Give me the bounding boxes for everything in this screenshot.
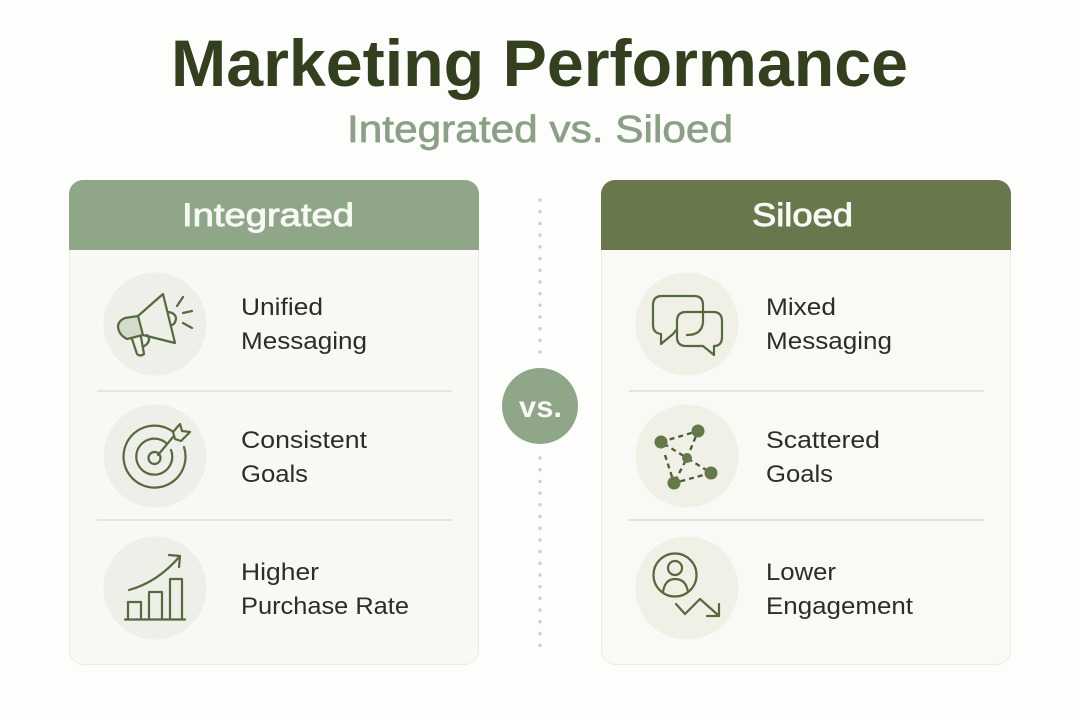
text: mixed messaging (766, 294, 892, 355)
icon: target (104, 404, 206, 508)
badge: vs. (502, 368, 578, 444)
text: consistent goals (241, 427, 367, 488)
heading: siloed: Siloed (752, 197, 853, 233)
text: unified messaging (241, 294, 367, 355)
divider: dotted line with vs. badge (502, 200, 578, 646)
text: lower engagement: Lower (766, 559, 836, 586)
text: consistent goals: Consistent (241, 427, 367, 454)
panel header: siloed (601, 180, 1011, 250)
text: unified messaging: Messaging (241, 328, 367, 355)
heading: integrated: Integrated (182, 197, 354, 233)
text: mixed messaging: Messaging (766, 328, 892, 355)
text: scattered goals: Goals (766, 461, 833, 488)
text: consistent goals: Goals (241, 461, 308, 488)
text: scattered goals: Scattered (766, 427, 880, 454)
text: higher purchase rate: Purchase Rate (241, 593, 409, 620)
text: mixed messaging: Mixed (766, 294, 836, 321)
text: higher purchase rate: Higher (241, 559, 319, 586)
text: lower engagement (766, 559, 913, 620)
panel: siloed (601, 180, 1011, 664)
icon: falling engagement (636, 536, 738, 640)
icon: rising bar chart (104, 536, 206, 640)
subtitle: Integrated vs. Siloed (347, 109, 733, 151)
text: unified messaging: Unified (241, 294, 323, 321)
title: Marketing Performance (171, 26, 908, 100)
panel: integrated (69, 180, 479, 664)
panel header: integrated (69, 180, 479, 250)
text: higher purchase rate (241, 559, 409, 620)
text: lower engagement: Engagement (766, 593, 913, 620)
icon: speech bubbles (636, 272, 738, 376)
text: scattered goals (766, 427, 880, 488)
icon: megaphone (104, 272, 206, 376)
icon: scattered network (636, 404, 738, 508)
badge: vs.: vs. (519, 391, 562, 424)
